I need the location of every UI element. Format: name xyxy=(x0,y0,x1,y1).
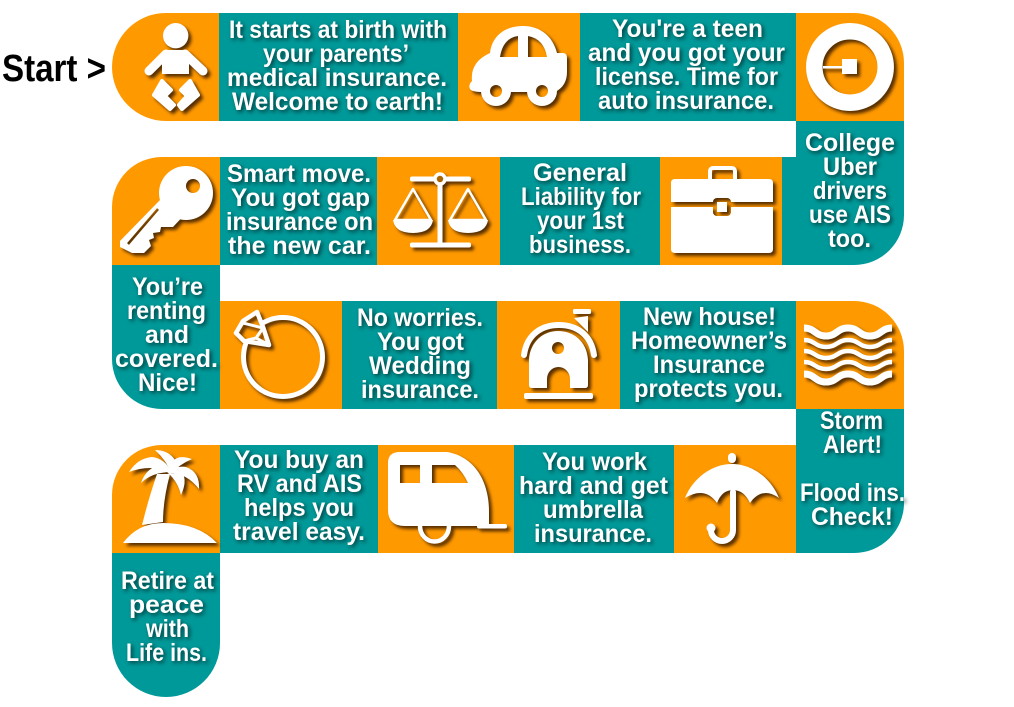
text: gap insurance: the new car. xyxy=(228,232,371,260)
text: college uber: drivers xyxy=(813,177,887,205)
text: renting: You’re xyxy=(132,273,203,301)
text: storm alert: Check! xyxy=(811,503,893,531)
text: renting: covered. xyxy=(115,345,218,373)
text: gap insurance xyxy=(226,160,373,260)
text: birth: medical insurance. xyxy=(227,64,447,92)
icon: car xyxy=(469,26,567,106)
text: RV: helps you xyxy=(244,494,354,522)
tile: gap text xyxy=(220,157,377,265)
text: homeowner: protects you. xyxy=(634,375,783,403)
tile: palm xyxy=(112,445,220,553)
text: liability: business. xyxy=(529,231,631,259)
icon: palm tree xyxy=(123,450,217,543)
text: liability xyxy=(521,159,641,259)
text: renting: and xyxy=(145,321,189,349)
icon: house xyxy=(524,309,594,399)
text: retire: peace xyxy=(129,591,204,619)
text: retire xyxy=(121,567,215,667)
tile: waves xyxy=(796,301,904,409)
tile: uber xyxy=(796,13,904,121)
text: birth xyxy=(227,16,447,116)
text: storm alert: Alert! xyxy=(823,431,882,459)
tile: RV text xyxy=(220,445,378,553)
tile: teen text xyxy=(580,13,796,121)
text: college uber xyxy=(805,129,895,253)
text: teen: You're a teen xyxy=(612,15,763,43)
text: liability: your 1st xyxy=(537,207,625,235)
tile: storm text xyxy=(796,409,904,553)
text: RV: You buy an xyxy=(234,446,364,474)
text: liability: General xyxy=(533,159,627,187)
text: college uber: College xyxy=(805,129,895,157)
tile: homeowner text xyxy=(620,301,796,409)
text: retire: Retire at xyxy=(121,567,215,595)
text: RV xyxy=(233,446,365,546)
text: wedding: insurance. xyxy=(361,376,479,404)
text: umbrella: umbrella xyxy=(543,496,644,524)
text: homeowner xyxy=(631,303,787,403)
tile: scales xyxy=(377,157,500,265)
text: homeowner: New house! xyxy=(643,303,776,331)
text: umbrella xyxy=(519,448,669,548)
icon: RV camper xyxy=(388,452,507,542)
text: teen: license. Time for xyxy=(595,63,778,91)
text: wedding: No worries. xyxy=(357,304,483,332)
text: college uber: use AIS xyxy=(809,201,891,229)
text: college uber: too. xyxy=(828,225,871,253)
tile: baby xyxy=(112,13,219,121)
text: renting xyxy=(115,273,218,397)
text: homeowner: Insurance xyxy=(653,351,765,379)
icon: scales xyxy=(393,174,488,248)
text: gap insurance: insurance on xyxy=(226,208,373,236)
text: wedding: Wedding xyxy=(369,352,471,380)
text: gap insurance: You got gap xyxy=(231,184,370,212)
text: storm alert xyxy=(800,407,905,531)
icon: waves xyxy=(804,328,892,382)
icon: baby xyxy=(149,23,203,109)
tile: retire text xyxy=(112,553,220,697)
text: college uber: Uber xyxy=(823,153,877,181)
icon: briefcase xyxy=(671,168,773,253)
tile: umbrella xyxy=(674,445,796,553)
tile: car xyxy=(458,13,580,121)
tile: renting text xyxy=(112,265,220,409)
board path tiles xyxy=(112,13,904,697)
text: renting: renting xyxy=(127,297,206,325)
text: umbrella: insurance. xyxy=(534,520,652,548)
text: birth: It starts at birth with xyxy=(229,16,447,44)
tile: RV xyxy=(378,445,514,553)
tile: briefcase xyxy=(660,157,782,265)
tile: house xyxy=(497,301,620,409)
text: homeowner: Homeowner’s xyxy=(631,327,787,355)
text: RV: RV and AIS xyxy=(237,470,362,498)
icon: wedding ring xyxy=(236,312,322,396)
icon: uber ring xyxy=(814,31,886,103)
text: RV: travel easy. xyxy=(233,518,365,546)
text: liability: Liability for xyxy=(521,183,641,211)
tile: umbrella text xyxy=(514,445,674,553)
tile: key xyxy=(112,157,220,265)
text: renting: Nice! xyxy=(138,369,197,397)
tile: wedding text xyxy=(342,301,497,409)
text: wedding xyxy=(357,304,483,404)
text: teen xyxy=(588,15,785,115)
text: retire: with xyxy=(145,615,189,643)
text: birth: Welcome to earth! xyxy=(232,88,443,116)
tile: liability text xyxy=(500,157,660,265)
text: umbrella: hard and get xyxy=(519,472,669,500)
text: umbrella: You work xyxy=(542,448,647,476)
start label: Start > xyxy=(2,48,106,90)
icon: umbrella xyxy=(685,453,779,541)
text: birth: your parents’ xyxy=(263,40,409,68)
text: teen: auto insurance. xyxy=(598,87,774,115)
text: storm alert: Flood ins. xyxy=(800,479,905,507)
text: retire: Life ins. xyxy=(126,639,207,667)
text: wedding: You got xyxy=(377,328,465,356)
text: storm alert: Storm xyxy=(820,407,883,435)
tile: ring xyxy=(220,301,342,409)
icon: key xyxy=(120,166,213,253)
tile: birth text xyxy=(219,13,458,121)
text: teen: and you got your xyxy=(588,39,785,67)
text: gap insurance: Smart move. xyxy=(227,160,371,188)
tile: college text xyxy=(782,121,904,265)
